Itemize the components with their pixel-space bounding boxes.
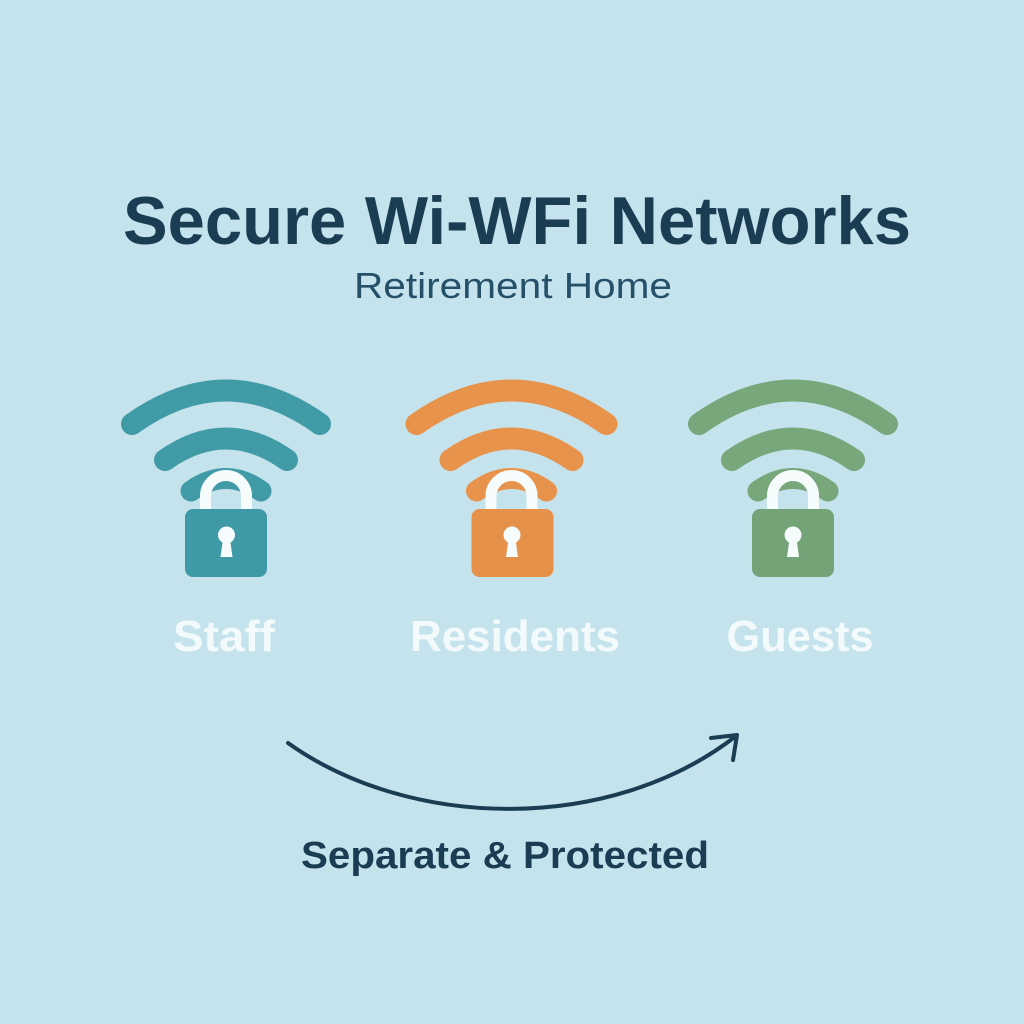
- icon: residents wifi lock: [416, 390, 606, 577]
- label: residents: Residents: [410, 612, 620, 661]
- arrow: curved connector: [288, 735, 737, 809]
- caption: Separate & Protected: [301, 835, 709, 877]
- icon: guests wifi lock: [699, 390, 887, 577]
- icon: staff wifi lock: [132, 390, 320, 577]
- title: Secure Wi-WFi Networks: [123, 183, 911, 259]
- label: staff: Staff: [173, 612, 275, 661]
- subtitle: Retirement Home: [354, 265, 672, 306]
- label: guests: Guests: [726, 612, 874, 661]
